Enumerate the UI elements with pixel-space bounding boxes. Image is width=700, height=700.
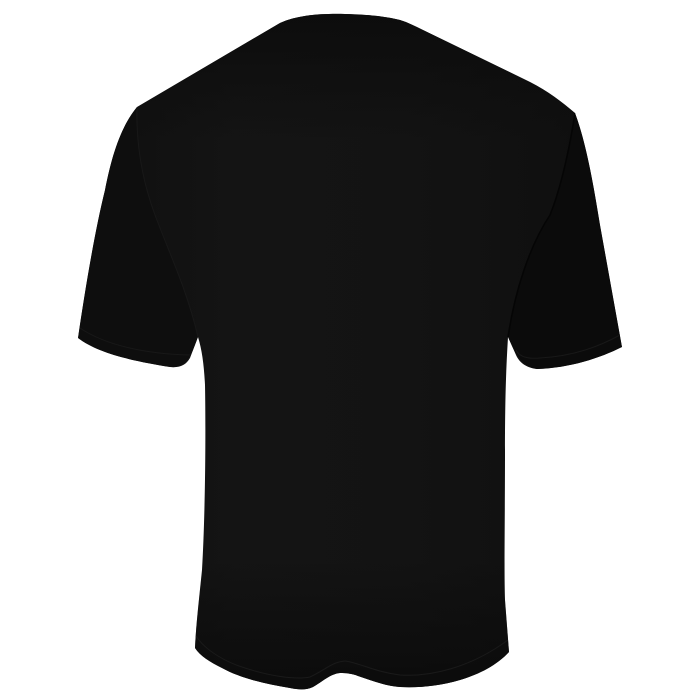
- yoke shadow: [131, 14, 578, 120]
- bottom hem stitching: [196, 636, 508, 678]
- left sleeve: [78, 107, 198, 367]
- illustration: black t-shirt back view: [78, 14, 622, 690]
- sleeve hem stitching: [80, 328, 190, 355]
- hem shadow: [195, 582, 509, 690]
- armhole seams: [137, 107, 575, 337]
- right sleeve: [508, 113, 622, 369]
